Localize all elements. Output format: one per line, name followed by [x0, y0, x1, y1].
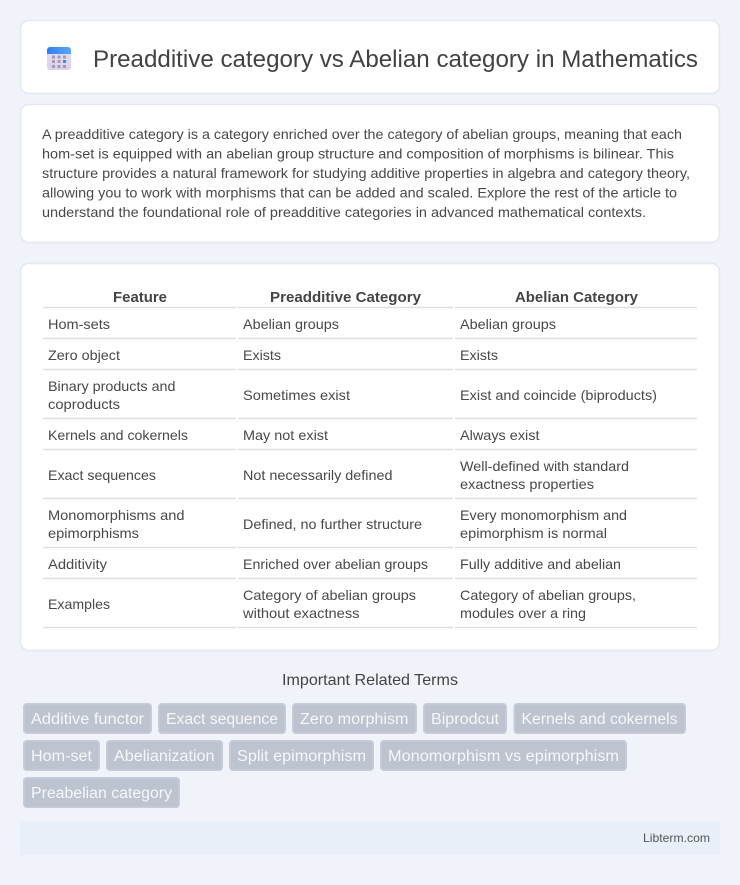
- tag: Abelianization: [107, 741, 222, 770]
- intro paragraph: hom-set is equipped with an abelian group structure and composition of morphisms is bilinear. This: [42, 146, 674, 162]
- row: Monomorphisms: epimorphism is normal: [460, 525, 607, 541]
- row: Examples: Category of abelian groups: [243, 587, 416, 603]
- row: Binary products: coproducts: [48, 396, 120, 412]
- table header row: [113, 290, 638, 306]
- tag: Exact sequence: Exact sequence: [166, 711, 278, 728]
- row: Binary products: [48, 378, 657, 412]
- tag: Monomorphism vs epimorphism: [381, 741, 626, 770]
- tag: Preabelian category: [24, 778, 179, 807]
- tag: Biprodcut: [424, 704, 506, 733]
- tag: Zero morphism: [293, 704, 416, 733]
- row: Binary products: Sometimes exist: [243, 387, 350, 403]
- row: Hom-sets: [48, 316, 556, 332]
- row: Zero object: Zero object: [48, 347, 120, 363]
- row: Exact sequences: Not necessarily defined: [243, 467, 392, 483]
- title: Preadditive category vs Abelian category in Mathematics: [93, 46, 698, 73]
- row: Examples: modules over a ring: [460, 605, 586, 621]
- tag: Split epimorphism: Split epimorphism: [237, 748, 366, 765]
- table header row: Preadditive Category: [270, 290, 421, 306]
- row: Kernels: Always exist: [460, 427, 540, 443]
- row: Hom-sets: Hom-sets: [48, 316, 110, 332]
- row: Monomorphisms: [48, 507, 627, 541]
- row: Additivity: Enriched over abelian groups: [243, 556, 428, 572]
- tag: Kernels and cokernels: [514, 704, 685, 733]
- row: Hom-sets: Abelian groups: [460, 316, 556, 332]
- row: Examples: Examples: [48, 596, 110, 612]
- table header row: Feature: [113, 290, 167, 306]
- tag: Abelianization: Abelianization: [114, 748, 214, 765]
- panel: introduction: [20, 104, 720, 242]
- row: Monomorphisms: Monomorphisms and: [48, 507, 184, 523]
- row: Hom-sets: Abelian groups: [243, 316, 339, 332]
- row: Kernels: [48, 427, 540, 443]
- row: Additivity: Fully additive and abelian: [460, 556, 621, 572]
- tag: Split epimorphism: [230, 741, 373, 770]
- row: Monomorphisms: Every monomorphism and: [460, 507, 627, 523]
- row: Additivity: [48, 556, 621, 572]
- tag: Kernels and cokernels: Kernels and cokernels: [522, 711, 678, 728]
- row: Additivity: Additivity: [48, 556, 107, 572]
- row: Zero object: Exists: [460, 347, 498, 363]
- intro paragraph: structure provides a natural framework for studying additive properties in algebra and category theory,: [42, 165, 690, 181]
- tag: Additive functor: [24, 704, 151, 733]
- tag: Preabelian category: Preabelian category: [31, 785, 172, 802]
- row: Examples: Category of abelian groups,: [460, 587, 636, 603]
- tag: Biprodcut: Biprodcut: [431, 711, 500, 728]
- row: Kernels: Kernels and cokernels: [48, 427, 188, 443]
- tag: Monomorphism vs epimorphism: Monomorphism vs epimorphism: [388, 748, 619, 765]
- table header row: Abelian Category: [515, 290, 638, 306]
- row: Exact sequences: Well-defined with standard: [460, 458, 629, 474]
- row: Zero object: [48, 347, 498, 363]
- row: Binary products: Exist and coincide (biproducts): [460, 387, 657, 403]
- row: Exact sequences: exactness properties: [460, 476, 594, 492]
- row: Examples: without exactness: [242, 605, 360, 621]
- row: Exact sequences: [48, 458, 629, 492]
- footer credit: Libterm.com: [643, 831, 710, 845]
- heading: related terms: Important Related Terms: [282, 672, 458, 689]
- row: Kernels: May not exist: [243, 427, 328, 443]
- footer bar: [20, 821, 720, 855]
- tag: Hom-set: [24, 741, 99, 770]
- tag: Hom-set: Hom-set: [31, 748, 93, 765]
- intro paragraph: allowing you to work with morphisms that can be added and scaled. Explore the rest of the article to: [42, 184, 677, 200]
- icon: calendar: [47, 47, 71, 70]
- row: Monomorphisms: epimorphisms: [48, 525, 139, 541]
- row: Zero object: Exists: [243, 347, 281, 363]
- tag: Additive functor: Additive functor: [31, 711, 144, 728]
- intro paragraph: understand the foundational role of preadditive categories in advanced mathematical contexts.: [42, 204, 646, 220]
- intro paragraph: [42, 126, 690, 220]
- panel: comparison table: [20, 264, 720, 650]
- header panel: [20, 20, 720, 94]
- row: Binary products: Binary products and: [48, 378, 176, 394]
- row: Examples: [48, 587, 636, 621]
- row: Monomorphisms: Defined, no further structure: [243, 516, 422, 532]
- related term tags: [24, 704, 685, 807]
- row: Exact sequences: Exact sequences: [48, 467, 156, 483]
- intro paragraph: A preadditive category is a category enriched over the category of abelian groups, meaning that each: [42, 126, 682, 142]
- tag: Exact sequence: [159, 704, 285, 733]
- tag: Zero morphism: Zero morphism: [300, 711, 408, 728]
